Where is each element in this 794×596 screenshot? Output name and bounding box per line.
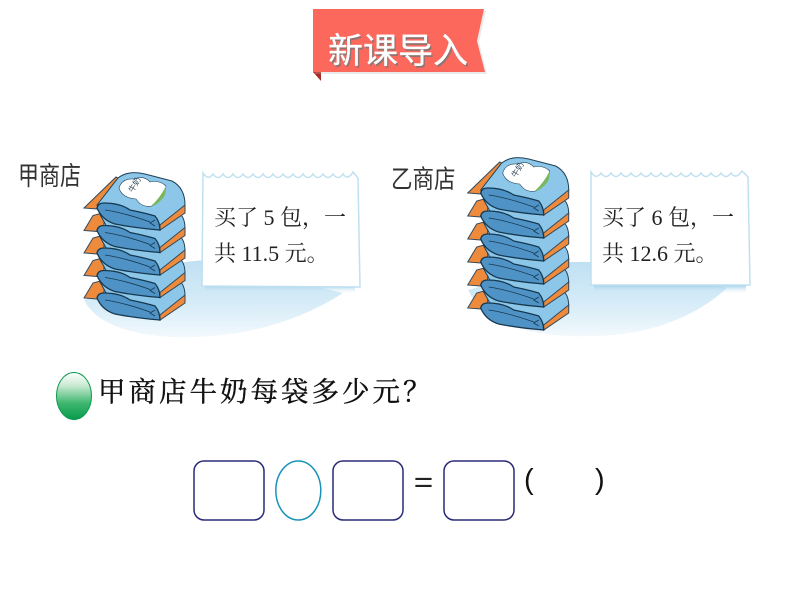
store A milk stack illustration — [84, 173, 343, 337]
operator oval — [276, 461, 321, 520]
store B note card — [591, 171, 750, 293]
unit parentheses: ( — [524, 464, 534, 496]
equals sign: = — [414, 466, 433, 498]
store B label: 乙商店 — [391, 165, 455, 195]
store B milk stack illustration: 牛奶 — [509, 160, 526, 179]
store B milk stack illustration — [468, 158, 727, 336]
title banner — [313, 9, 487, 81]
blank box 2 — [333, 461, 403, 520]
store A milk stack illustration: 牛奶 — [126, 175, 143, 194]
store B note text: 买了 6 包，一 — [602, 205, 734, 231]
icon: green ball bullet — [56, 372, 92, 420]
blank box 1 — [194, 461, 264, 520]
unit parentheses: ) — [595, 464, 605, 496]
store A note card — [202, 172, 360, 293]
title banner: 新课导入 — [330, 34, 470, 73]
store A note text: 共 11.5 元。 — [214, 241, 329, 266]
store A note text: 买了 5 包，一 — [214, 205, 346, 231]
store B note text: 共 12.6 元。 — [602, 241, 718, 266]
blank box 3 — [444, 461, 514, 520]
store A label: 甲商店 — [18, 162, 81, 192]
question text: 甲商店牛奶每袋多少元？ — [98, 376, 434, 407]
answer equation — [194, 461, 605, 520]
title banner: 新课导入 — [328, 32, 468, 71]
